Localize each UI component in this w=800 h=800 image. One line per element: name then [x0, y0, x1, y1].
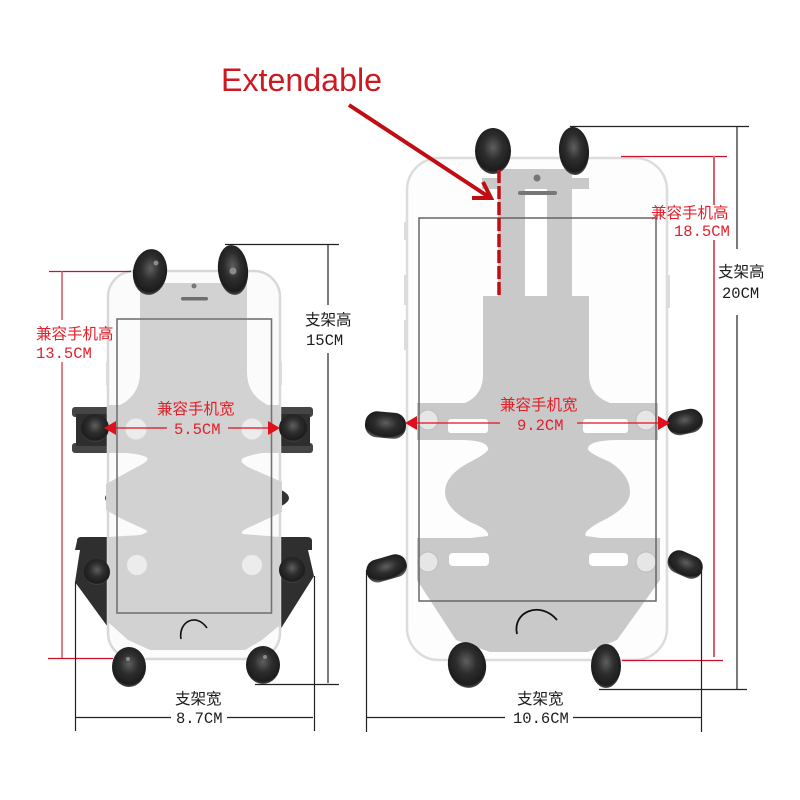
- right phone width dimension: 兼容手机宽: [500, 396, 578, 414]
- right holder height dimension: [570, 126, 765, 690]
- right holder: extended configuration: [364, 126, 706, 691]
- right mount body: [417, 169, 660, 652]
- right holder width dimension: 支架宽: [517, 690, 564, 708]
- right home button arc: [516, 610, 557, 634]
- left belly dark backing: [105, 478, 289, 518]
- left holder width dimension: [76, 576, 314, 731]
- right holder width dimension: 10.6CM: [513, 710, 569, 728]
- right holder width dimension: [366, 568, 702, 732]
- left phone height dimension: 13.5CM: [36, 345, 92, 363]
- left upper bolts: [125, 418, 263, 440]
- arrow: extendable pointer: [349, 105, 491, 198]
- left knobs: [81, 244, 307, 687]
- right phone height dimension: 兼容手机高: [651, 204, 729, 222]
- left holder height dimension: [225, 244, 352, 684]
- left phone width dimension: 兼容手机宽: [157, 400, 235, 418]
- left holder: small configuration: [72, 244, 314, 687]
- left phone side buttons: [107, 362, 281, 385]
- left phone height dimension: [36, 271, 131, 658]
- left screen outline: [117, 319, 272, 613]
- title: Extendable: Extendable: [221, 62, 382, 98]
- right phone height dimension: [621, 156, 730, 660]
- left holder height dimension: 15CM: [306, 332, 343, 350]
- left holder width dimension: 8.7CM: [176, 710, 223, 728]
- right holder height dimension: 20CM: [722, 285, 759, 303]
- right mount slots: [448, 189, 628, 566]
- left phone height dimension: 兼容手机高: [36, 325, 114, 343]
- right phone width dimension: [405, 396, 670, 435]
- right phone height dimension: 18.5CM: [674, 223, 730, 241]
- right screen outline: [419, 218, 656, 601]
- right phone side buttons: [405, 222, 669, 350]
- left home button arc: [181, 620, 207, 639]
- right holder height dimension: 支架高: [718, 263, 765, 281]
- left lower bolts: [126, 554, 262, 576]
- left holder width dimension: 支架宽: [175, 690, 222, 708]
- left lower dark clamp: [75, 537, 314, 630]
- left phone earpiece and camera: [181, 284, 208, 300]
- left mount gray body: [106, 283, 282, 650]
- left upper dark clamp bar: [72, 407, 313, 453]
- left knob highlights: [126, 260, 267, 661]
- right earpiece and camera: [518, 174, 557, 195]
- right bolts: [418, 410, 656, 572]
- left phone width dimension: [104, 400, 280, 439]
- left holder height dimension: 支架高: [305, 311, 352, 329]
- right phone glass: [407, 158, 667, 660]
- right knobs: [364, 126, 706, 691]
- left phone width dimension: 5.5CM: [174, 421, 221, 439]
- red dashed extension line: [497, 170, 501, 297]
- right phone width dimension: 9.2CM: [517, 417, 564, 435]
- left phone glass: [108, 271, 280, 659]
